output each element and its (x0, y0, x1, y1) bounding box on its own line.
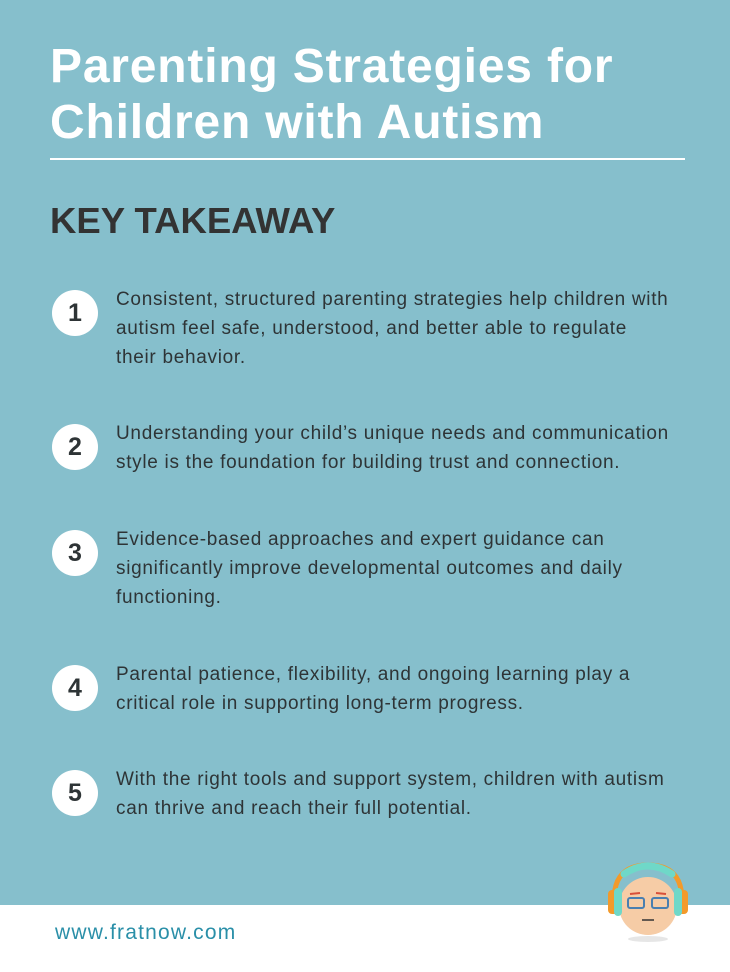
item 3: 3 (68, 539, 82, 567)
item 3: significantly improve developmental outcomes and daily (116, 558, 623, 579)
item 5: 5 (68, 779, 82, 807)
item 1: Consistent, structured parenting strategies help children with (116, 289, 668, 310)
item 3: functioning. (116, 587, 222, 608)
title (50, 40, 613, 149)
icon: mascot with headphones (608, 862, 688, 942)
item 2: style is the foundation for building trust and connection. (116, 452, 620, 473)
title: Parenting Strategies for (50, 40, 613, 93)
heading: key takeaway: KEY TAKEAWAY (50, 200, 335, 241)
item 2: Understanding your child’s unique needs and communication (116, 423, 669, 444)
title: Children with Autism (50, 96, 544, 149)
footer url: www.fratnow.com (55, 921, 236, 944)
item 5: can thrive and reach their full potential. (116, 798, 472, 819)
item 3: Evidence-based approaches and expert guidance can (116, 529, 605, 550)
item 3 (52, 529, 623, 608)
item 1 (52, 289, 668, 368)
item 4: 4 (68, 674, 82, 702)
item 1: 1 (68, 299, 82, 327)
item 4: critical role in supporting long-term progress. (116, 693, 524, 714)
item 5 (52, 769, 665, 819)
item 5: With the right tools and support system, children with autism (116, 769, 665, 790)
item 1: their behavior. (116, 347, 246, 368)
item 2: 2 (68, 433, 82, 461)
item 2 (52, 423, 669, 473)
item 4 (52, 664, 630, 714)
item 1: autism feel safe, understood, and better able to regulate (116, 318, 627, 339)
item 4: Parental patience, flexibility, and ongoing learning play a (116, 664, 630, 685)
